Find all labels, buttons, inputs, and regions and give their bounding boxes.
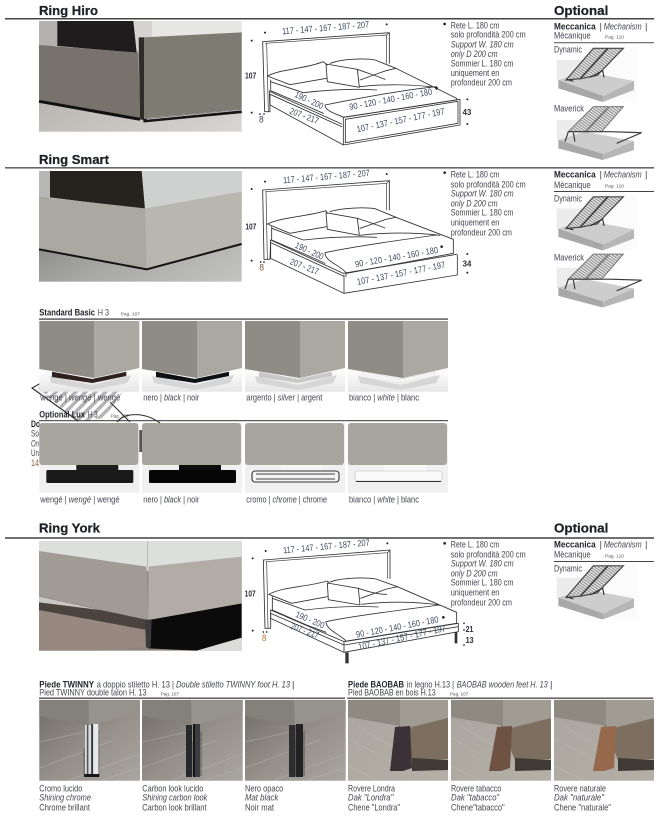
- dimension labels: 117 - 147 - 167 - 187 - 207: [283, 168, 370, 185]
- photo: chrome legs: [39, 700, 140, 781]
- occluded text fragment: 14: [31, 458, 39, 469]
- section: Ring Hiro: [5, 3, 654, 160]
- caption: matte black: Noir mat: [245, 802, 274, 813]
- caption: carbon look: Carbon look lucido: [142, 784, 203, 795]
- mechanism panel: Meccanica: [554, 539, 596, 550]
- occluded text fragment: Do: [31, 419, 40, 430]
- mechanism panel: Pag. 110: [605, 553, 624, 559]
- bed line drawing with dimensions: [245, 537, 474, 663]
- note: support size: Rete L. 180 cm: [451, 20, 499, 31]
- note: support size: only D 200 cm: [451, 199, 498, 210]
- mechanism panel: Maverick: [554, 252, 584, 263]
- caption: matte black: Nero opaco: [245, 784, 283, 795]
- caption: Londra: Dak "Londra": [348, 792, 394, 803]
- caption: carbon look: Shining carbon look: [142, 792, 208, 803]
- divider line: [5, 167, 654, 169]
- icon: Maverick lift mechanism: [557, 254, 642, 307]
- mechanism panel: Meccanica: [554, 169, 596, 180]
- note: support size: Sommier L. 180 cm: [451, 578, 513, 589]
- caption: Londra: [348, 784, 400, 813]
- note: support size: solo profondità 200 cm: [451, 30, 526, 41]
- photo: Ring York bed corner: [39, 541, 242, 651]
- icon: Dynamic lift mechanism: [557, 47, 637, 102]
- heading: Optional Lux: [39, 410, 129, 421]
- mechanism panel: [554, 539, 654, 619]
- heading: Piede TWINNY: [39, 679, 294, 699]
- caption: black: nero | black | noir: [143, 393, 199, 404]
- photo: black foot: [142, 321, 242, 392]
- mechanism panel: Mechanism: [604, 21, 642, 32]
- heading: Piede BAOBAB: [348, 679, 552, 699]
- photo: carbon look legs: [142, 700, 243, 781]
- note: support size: uniquement en: [451, 68, 499, 79]
- dimension markers: [251, 171, 468, 274]
- note: support size: Support W. 180 cm: [451, 558, 514, 569]
- occluded text fragment: So: [31, 429, 39, 440]
- heading: Piede BAOBAB: BAOBAB wooden feet H. 13: [457, 679, 548, 690]
- caption: naturale: [554, 784, 611, 813]
- dimension labels: 8: [259, 263, 264, 273]
- icon: Maverick lift mechanism: [557, 107, 642, 160]
- heading: Piede BAOBAB: in legno H.13 |: [407, 679, 454, 690]
- section: TWINNY feet: [39, 679, 346, 813]
- caption: chrome: [39, 784, 91, 813]
- heading: Piede TWINNY: Pag. 107: [161, 692, 179, 698]
- dimension labels: [245, 168, 471, 287]
- mechanism panel: |: [600, 169, 602, 180]
- mechanism panel: Pag. 110: [605, 34, 624, 40]
- section: Ring York: [5, 521, 654, 663]
- caption: tabacco: Rovere tabacco: [451, 784, 501, 795]
- heading: Piede BAOBAB: Pag. 107: [450, 692, 469, 698]
- divider line: [5, 18, 654, 20]
- caption: chrome: Cromo lucido: [39, 784, 82, 795]
- photo: chrome platform foot: [245, 423, 345, 493]
- caption: carbon look: Carbon look brillant: [142, 802, 207, 813]
- caption: white: bianco | white | blanc: [349, 393, 419, 404]
- note: support size: Support W. 180 cm: [451, 189, 514, 200]
- section: Standard Basic feet: [39, 308, 448, 404]
- photo: tobacco oak leg: [451, 700, 551, 781]
- dimension labels: 107: [245, 71, 256, 81]
- heading: Standard Basic: H 3: [98, 308, 109, 319]
- heading: Optional: Optional: [554, 521, 608, 536]
- photo: white foot: [348, 321, 448, 392]
- mechanism panel: |: [600, 21, 602, 32]
- heading: Standard Basic: Standard Basic: [39, 308, 95, 319]
- caption: Londra: Chene "Londra": [348, 802, 400, 813]
- note: support size: Rete L. 180 cm: [451, 169, 499, 180]
- note: support size: [451, 539, 526, 609]
- caption: black: nero | black | noir: [143, 495, 199, 506]
- divider line: [39, 420, 448, 421]
- heading: Ring Hiro: Ring Hiro: [39, 3, 98, 18]
- heading: Ring Smart: Ring Smart: [39, 152, 110, 167]
- dimension labels: 90 - 120 - 140 - 160 - 180: [349, 87, 433, 112]
- dimension labels: 43: [463, 107, 471, 117]
- photo: Ring Smart bed corner: [39, 171, 242, 282]
- note: support size: solo profondità 200 cm: [451, 549, 526, 560]
- caption: chrome: Chrome brillant: [39, 802, 90, 813]
- caption: matte black: [245, 784, 283, 813]
- heading: Optional: Optional: [554, 3, 608, 18]
- caption: chrome: cromo | chrome | chrome: [246, 495, 327, 506]
- caption: silver: argento | silver | argent: [246, 393, 323, 404]
- dimension labels: 107: [245, 589, 256, 599]
- dimension labels: 207 - 217: [289, 257, 320, 277]
- note: support size: profondeur 200 cm: [451, 228, 512, 239]
- heading: Optional Lux: H 3: [88, 410, 98, 421]
- dimension labels: 8: [262, 633, 266, 643]
- dimension labels: [245, 19, 471, 134]
- occluded text fragment: [31, 419, 40, 469]
- mechanism panel: Dynamic: [554, 194, 582, 205]
- heading: Optional Lux: Optional Lux: [39, 410, 86, 421]
- caption: naturale: Rovere naturale: [554, 784, 606, 795]
- heading: Optional Lux: Pag. 107: [111, 414, 129, 420]
- section: BAOBAB feet: [347, 679, 654, 813]
- bed line drawing with dimensions: [245, 168, 471, 293]
- dimension markers: [251, 23, 468, 125]
- mechanism panel: |: [645, 21, 647, 32]
- divider line: [5, 537, 654, 539]
- note: support size: Sommier L. 180 cm: [451, 58, 513, 69]
- caption: naturale: Chene "naturale": [554, 802, 611, 813]
- occluded text fragment: On: [31, 438, 39, 450]
- dimension labels: 107 - 137 - 157 - 177 - 197: [356, 106, 446, 134]
- divider line: [39, 697, 345, 699]
- divider line: [347, 697, 653, 699]
- caption: white: bianco | white | blanc: [349, 495, 419, 506]
- divider line: [39, 318, 448, 320]
- dimension labels: 8: [259, 115, 264, 125]
- dimension labels: 190 - 200: [294, 240, 325, 262]
- icon: Dynamic lift mechanism: [557, 195, 637, 250]
- heading: Piede TWINNY: |: [292, 679, 294, 690]
- heading: Standard Basic: [39, 308, 140, 319]
- mechanism panel: Mècanique: [554, 550, 591, 561]
- note: support size: Support W. 180 cm: [451, 39, 514, 50]
- mechanism panel: |: [645, 539, 647, 550]
- caption: tabacco: Dak "tabacco": [451, 792, 500, 803]
- note: support size: [451, 20, 526, 89]
- mechanism panel: Maverick: [554, 104, 584, 115]
- photo: Londra oak leg: [348, 700, 448, 781]
- overlapping slat drawing fragment: [32, 377, 160, 452]
- mechanism panel: Mècanique: [554, 31, 591, 42]
- mechanism panel: [554, 169, 654, 307]
- note: support size: profondeur 200 cm: [451, 78, 512, 89]
- photo: black platform foot: [142, 423, 242, 493]
- mechanism panel: Mechanism: [604, 169, 642, 180]
- dimension labels: 190 - 200: [293, 89, 325, 111]
- icon: Dynamic lift mechanism: [557, 564, 637, 619]
- caption: Londra: Rovere Londra: [348, 784, 396, 795]
- mechanism panel: Mècanique: [554, 180, 591, 191]
- dimension labels: 90 - 120 - 140 - 160 - 180: [354, 245, 439, 269]
- dimension labels: 107 - 137 - 157 - 177 - 197: [357, 623, 447, 652]
- heading: Piede TWINNY: a doppio stiletto H. 13 |: [97, 679, 174, 690]
- photo: matte black legs: [245, 700, 346, 781]
- heading: Piede TWINNY: Piede TWINNY: [39, 679, 95, 690]
- mechanism panel: |: [600, 539, 602, 550]
- mechanism panel: Dynamic: [554, 564, 582, 575]
- mechanism panel: Meccanica: [554, 21, 596, 32]
- heading: Piede TWINNY: Pied TWINNY double talon H. 13: [39, 688, 147, 699]
- note: support size: uniquement en: [451, 587, 499, 598]
- mechanism panel: Dynamic: [554, 45, 582, 56]
- note: support size: Sommier L. 180 cm: [451, 208, 513, 219]
- note: support size: solo profondità 200 cm: [451, 179, 526, 190]
- dimension labels: 117 - 147 - 167 - 187 - 207: [282, 19, 370, 36]
- note: support size: profondeur 200 cm: [451, 598, 512, 609]
- dimension labels: 117 - 147 - 167 - 187 - 207: [283, 537, 370, 555]
- heading: Ring York: Ring York: [39, 521, 101, 536]
- note: support size: Rete L. 180 cm: [451, 539, 499, 550]
- caption: carbon look: [142, 784, 208, 813]
- caption: wengé: wengé | wengé | wengé: [40, 495, 120, 506]
- dimension labels: 190 - 200: [294, 609, 326, 630]
- dimension labels: 107: [245, 222, 256, 232]
- dimension labels: 207 - 217: [289, 621, 320, 640]
- caption: tabacco: [451, 784, 505, 813]
- photo: wengé platform foot: [39, 423, 139, 493]
- dimension labels: 90 - 120 - 140 - 160 - 180: [355, 614, 439, 640]
- photo: wengé foot: [39, 321, 139, 392]
- photo: Ring Hiro bed corner: [39, 21, 242, 132]
- caption: chrome: Shining chrome: [39, 792, 91, 803]
- note: support size: only D 200 cm: [451, 49, 498, 60]
- heading: Piede BAOBAB: Pied BAOBAB en bois H.13: [348, 688, 436, 699]
- caption: matte black: Mat black: [245, 792, 279, 803]
- heading: Piede BAOBAB: |: [550, 679, 552, 690]
- bed line drawing with dimensions: [245, 19, 471, 145]
- note: support size: uniquement en: [451, 218, 499, 229]
- dimension labels: 34: [463, 259, 471, 269]
- photo: silver foot: [245, 321, 345, 392]
- occluded text fragment: Un: [31, 448, 39, 459]
- section: Ring Smart: [5, 152, 654, 307]
- dimension labels: 21: [466, 624, 473, 634]
- caption: naturale: Dak "naturale": [554, 792, 605, 803]
- dimension labels: 13: [466, 635, 474, 645]
- mechanism panel: |: [645, 169, 647, 180]
- note: support size: only D 200 cm: [451, 568, 498, 579]
- mechanism panel: Pag. 110: [605, 184, 624, 190]
- dimension markers: [252, 542, 465, 646]
- dimension labels: [245, 537, 474, 652]
- note: support size: [451, 169, 526, 239]
- heading: Standard Basic: Pag. 107: [121, 312, 140, 318]
- mechanism panel: Mechanism: [604, 539, 642, 550]
- caption: wengé: wengé | wengé | wengé: [39, 393, 120, 404]
- heading: Piede BAOBAB: Piede BAOBAB: [348, 679, 404, 690]
- caption: tabacco: Chene"tabacco": [451, 802, 505, 813]
- heading: Piede TWINNY: Double stiletto TWINNY foot H. 13: [176, 679, 291, 690]
- photo: natural oak leg: [554, 700, 654, 781]
- dimension labels: 107 - 137 - 157 - 177 - 197: [356, 260, 446, 287]
- section: Optional Lux feet: [39, 410, 448, 506]
- mechanism panel: [554, 21, 654, 160]
- dimension labels: 207 - 217: [288, 106, 320, 126]
- photo: white platform foot: [348, 423, 448, 493]
